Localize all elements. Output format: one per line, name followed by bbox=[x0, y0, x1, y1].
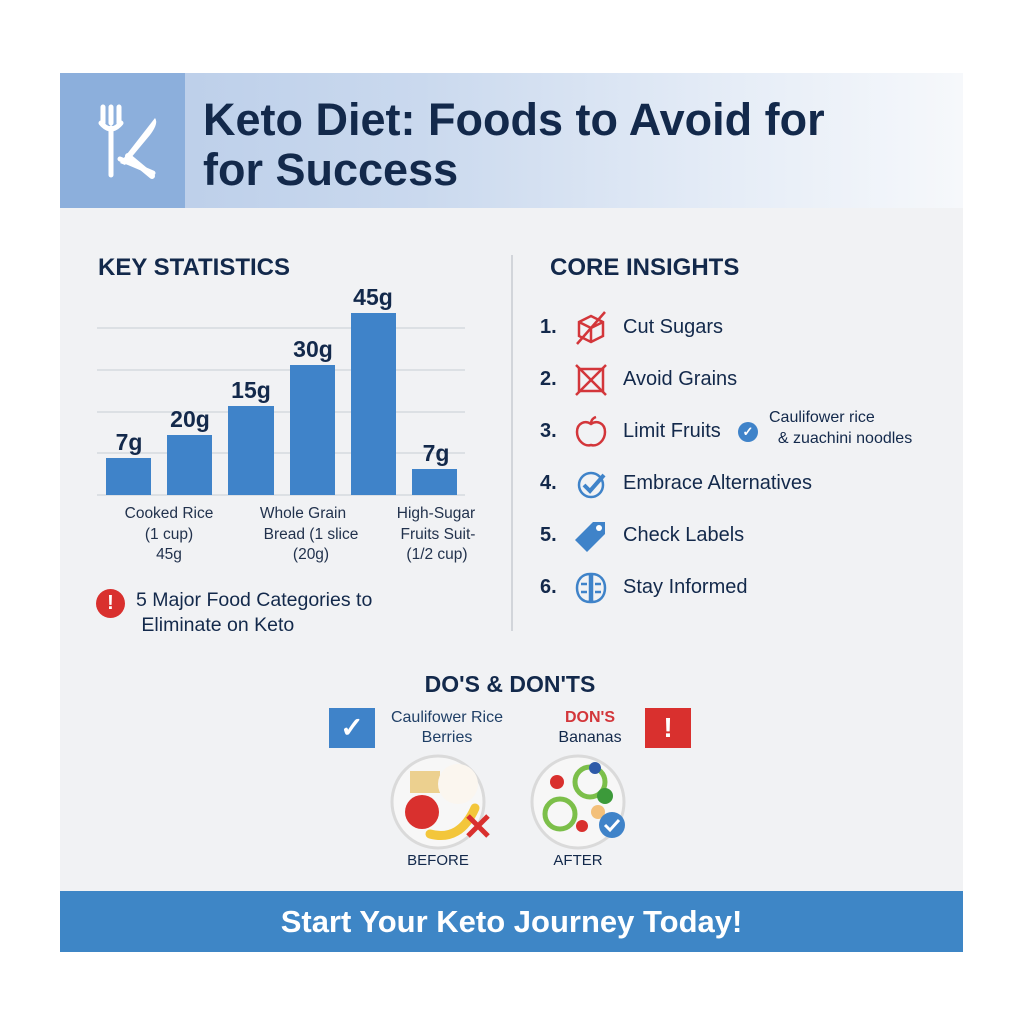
panel: key statistics bbox=[96, 254, 475, 636]
callout: 5 major food categories: ! bbox=[107, 592, 114, 614]
don'ts list: Bananas bbox=[558, 729, 622, 746]
insight list: Avoid Grains bbox=[623, 368, 737, 390]
do's list bbox=[391, 709, 503, 746]
title: Keto Diet: Foods to Avoid for bbox=[203, 94, 825, 145]
insight list: ✓ bbox=[743, 424, 753, 439]
bar chart: (1 cup) bbox=[145, 526, 193, 543]
insight list: Embrace Alternatives bbox=[623, 472, 812, 494]
insight list: 5. bbox=[540, 524, 557, 546]
insight list: Cut Sugars bbox=[623, 316, 723, 338]
bar chart: 7g bbox=[423, 440, 449, 466]
bar chart: 45g bbox=[353, 284, 393, 310]
insight list: & zuachini noodles bbox=[778, 430, 912, 447]
do's list: Berries bbox=[422, 729, 472, 746]
plate: before: BEFORE bbox=[407, 852, 469, 869]
icon: fork and knife bbox=[60, 73, 185, 208]
insight list: 3. bbox=[540, 420, 557, 442]
heading: do's & don'ts: DO'S & DON'TS bbox=[425, 671, 595, 697]
title bbox=[203, 94, 825, 195]
insight list: 6. bbox=[540, 576, 557, 598]
bar chart: (1/2 cup) bbox=[406, 546, 468, 563]
insight list: Stay Informed bbox=[623, 576, 748, 598]
insight list: Check Labels bbox=[623, 524, 744, 546]
icon: check box: ✓ bbox=[340, 712, 364, 743]
bar chart: Fruits Suit- bbox=[401, 526, 475, 543]
icon: warning box: ! bbox=[663, 712, 673, 743]
callout: 5 major food categories: Eliminate on Keto bbox=[141, 614, 294, 636]
plate: after bbox=[530, 754, 626, 869]
insight list: Caulifower rice bbox=[769, 409, 875, 426]
bar chart: 45g bbox=[156, 546, 182, 563]
footer banner bbox=[60, 891, 963, 952]
bar chart: Bread (1 slice bbox=[264, 526, 358, 543]
callout: 5 major food categories: 5 Major Food Categories to bbox=[136, 589, 372, 611]
heading: core insights: CORE INSIGHTS bbox=[550, 254, 739, 281]
insight list: 4. bbox=[540, 472, 557, 494]
bar chart: Whole Grain bbox=[260, 505, 346, 522]
bar chart: (20g) bbox=[293, 546, 329, 563]
panel: core insights bbox=[540, 254, 912, 604]
don'ts list: DON'S bbox=[565, 709, 615, 726]
title: for Success bbox=[203, 144, 458, 195]
bar chart: 20g bbox=[170, 406, 210, 432]
bar chart: 15g bbox=[231, 377, 271, 403]
bar chart bbox=[97, 284, 475, 563]
insight list bbox=[540, 311, 912, 604]
insight list: Limit Fruits bbox=[623, 420, 721, 442]
don'ts list bbox=[558, 709, 622, 746]
callout: 5 major food categories bbox=[96, 589, 372, 636]
plate: after: AFTER bbox=[553, 852, 603, 869]
footer banner: Start Your Keto Journey Today! bbox=[281, 904, 742, 939]
heading: key statistics: KEY STATISTICS bbox=[98, 254, 290, 281]
insight list: 1. bbox=[540, 316, 557, 338]
bar chart: Cooked Rice bbox=[125, 505, 213, 522]
icon: check box bbox=[329, 708, 375, 748]
bar chart: 30g bbox=[293, 336, 333, 362]
plate: before bbox=[390, 754, 490, 869]
bar chart: 7g bbox=[116, 429, 142, 455]
divider bbox=[511, 255, 512, 631]
panel: do's & don'ts bbox=[329, 671, 691, 869]
bar chart: High-Sugar bbox=[397, 505, 475, 522]
header bbox=[60, 73, 963, 208]
icon: warning box bbox=[645, 708, 691, 748]
insight list: 2. bbox=[540, 368, 557, 390]
card background bbox=[60, 208, 963, 891]
do's list: Caulifower Rice bbox=[391, 709, 503, 726]
